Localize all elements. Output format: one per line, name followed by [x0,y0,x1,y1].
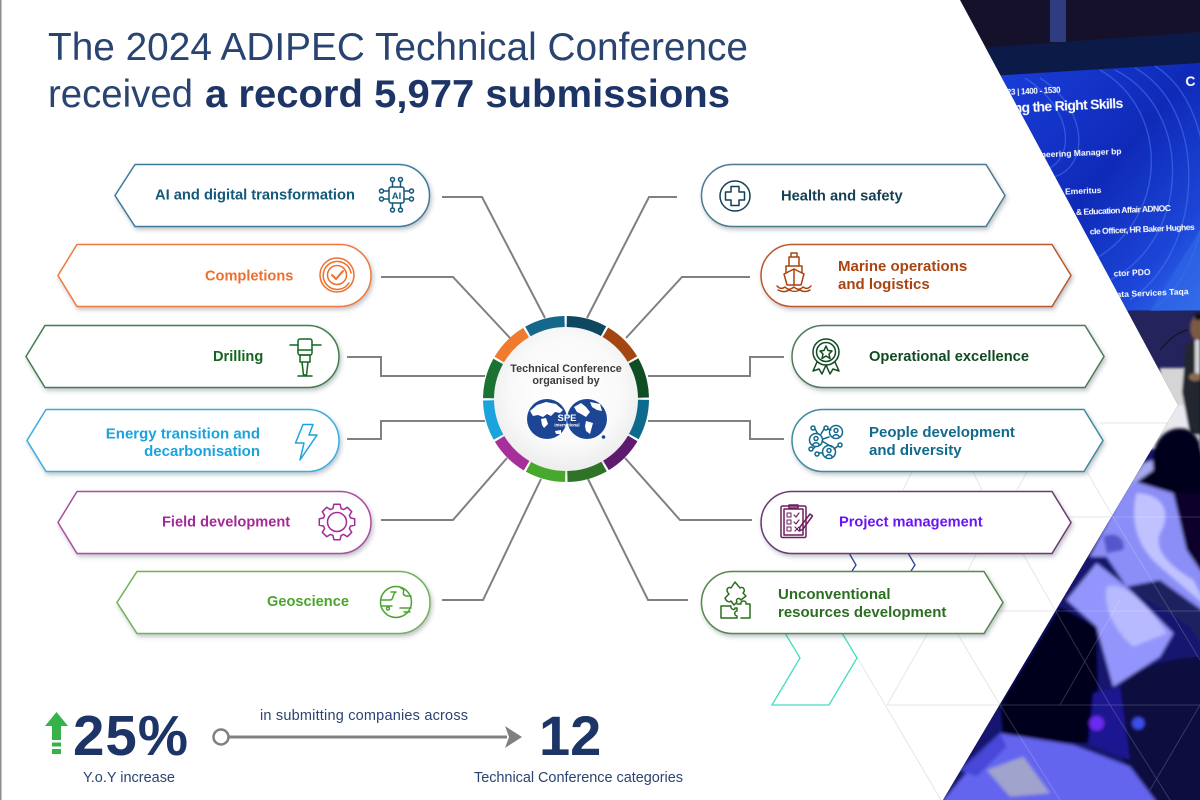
icon: connected people [809,426,842,458]
stat: 25%: 25% [73,704,188,767]
title line 2: bold figure: a record 5,977 submissions [205,73,730,116]
panel: People development and diversity [792,410,1103,472]
icon: globe [380,586,412,618]
icon: jackhammer [290,339,321,376]
colour ring with 12 segments [460,293,672,505]
presentation screen: C [1185,73,1196,89]
panel: Unconventional resources development: Unconventional [778,586,891,603]
panel: AI and digital transformation: AI and digital transformation [155,188,355,204]
background hexagon grid [857,423,1172,800]
panel: Drilling: Drilling [213,349,263,365]
panel: Health and safety [702,164,1005,226]
presentation screen: 2023 | 1400 - 1530 [998,86,1061,97]
connector lines [347,197,784,600]
icon: gear [319,504,355,540]
panel: AI and digital transformation [115,164,430,226]
caption: Technical Conference categories: Technical Conference categories [474,770,683,786]
icon: lightning bolt [296,424,317,460]
faint grid over photo [1000,515,1200,800]
icon: AI chip [380,178,414,212]
panel: Project management: Project management [839,514,983,530]
icon: ship [777,253,811,292]
arrow: companies to categories [214,726,522,748]
caption: Y.o.Y increase: Y.o.Y increase [83,770,175,786]
panel: Marine operations and logistics: Marine operations [838,258,967,275]
panel: People development and diversity: and diversity [869,442,962,459]
hub text: Technical Conference [510,363,622,375]
icon: puzzle pieces [721,582,750,618]
panel: Operational excellence [792,326,1104,388]
central hub: Technical Conference organised by SPE [460,293,672,505]
panel: Energy transition and decarbonisation: Energy transition and [106,426,260,442]
caption: in submitting companies across: in submitting companies across [260,708,468,724]
presentation screen: cle Officer, HR Baker Hughes [1090,222,1195,236]
title: The 2024 ADIPEC Technical Conference [48,26,748,69]
presentation screen: ineering Manager bp [1038,146,1122,160]
panel: Field development: Field development [162,514,290,530]
SPE logo [527,399,607,439]
panel: Health and safety: Health and safety [781,188,903,204]
presentation screen: & Education Affair ADNOC [1076,203,1171,217]
presentation screen: n [1017,114,1026,131]
presentation screen: ctor PDO [1113,267,1151,278]
presentation screen: ining the Right Skills [999,95,1124,116]
icon: award medal [813,339,839,374]
photo: conference stage and audience [943,0,1200,800]
presentation screen [990,63,1200,311]
presentation screen: ata Services Taqa [1116,286,1189,299]
icon: checklist clipboard [781,505,812,538]
icon: AI chip: AI [392,191,401,202]
panel: Marine operations and logistics: and logistics [838,276,930,293]
icon: check badge [320,258,354,292]
decorative chevrons [772,553,915,705]
SPE logo: SPE [557,413,577,424]
panel: Unconventional resources development: resources development [778,604,946,621]
panel: Field development [58,492,371,554]
presentation screen: Emeritus [1065,185,1102,197]
panel: Unconventional resources development [702,572,1003,634]
panel: Geoscience: Geoscience [267,594,349,610]
panel: Marine operations and logistics [761,244,1071,306]
panel: Project management [761,492,1071,554]
stat: 12: 12 [539,704,601,767]
panel: Energy transition and decarbonisation: decarbonisation [144,443,260,460]
icon: green up arrow [45,712,68,754]
SPE logo: International [554,422,580,428]
audience [927,428,1200,800]
speaker [1151,312,1200,451]
icon: medical cross [720,181,750,211]
panel: Energy transition and decarbonisation [27,410,339,472]
panel: Drilling [26,326,339,388]
hub text: organised by [532,375,600,387]
panel: Operational excellence: Operational excellence [869,349,1029,365]
panel: People development and diversity: People development [869,424,1015,441]
panel: Completions: Completions [205,268,293,284]
title line 2: received: received [48,73,193,116]
panel: Completions [58,244,371,306]
panel: Geoscience [117,572,430,634]
